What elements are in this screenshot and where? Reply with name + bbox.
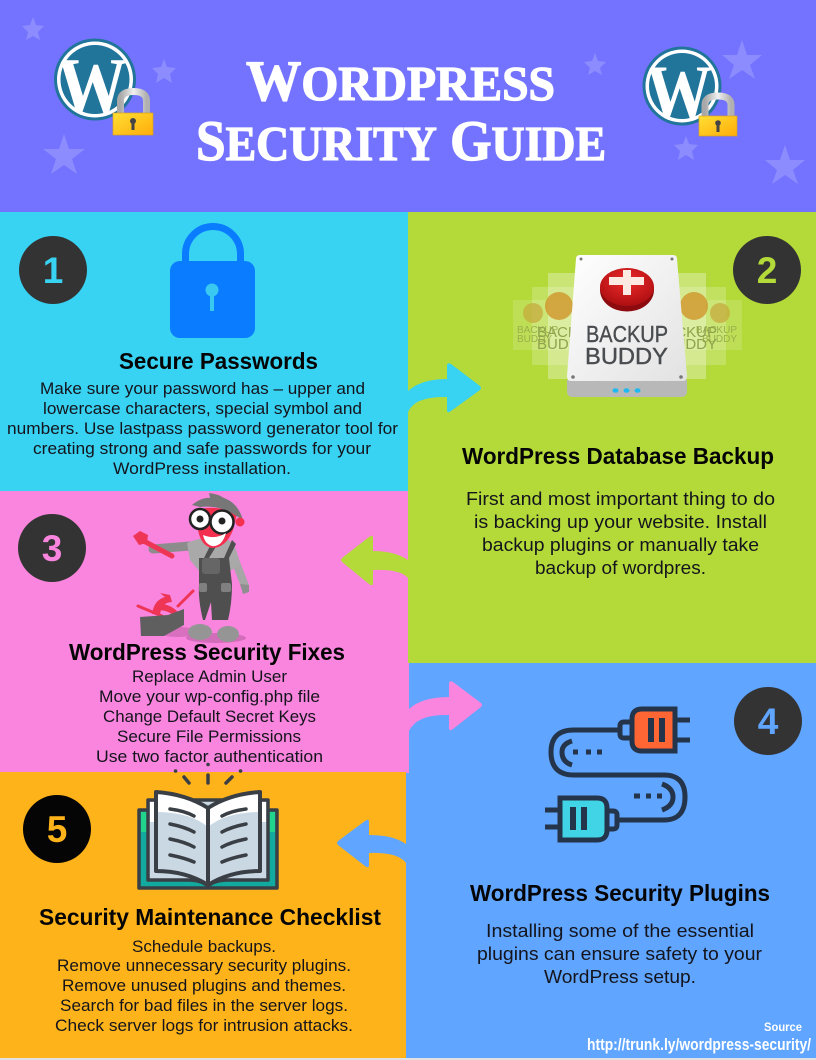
arrow: step 2 to step 3 (341, 536, 408, 585)
head (197, 508, 237, 548)
tools (138, 591, 193, 616)
text block: lowercase characters, special symbol and (43, 399, 362, 418)
number badge 2 (733, 236, 801, 304)
shoes (188, 624, 212, 640)
toolbox (140, 609, 184, 636)
icon: blue padlock (170, 227, 255, 338)
source credit (587, 1020, 811, 1054)
icon: mechanic character with toolbox (133, 493, 249, 643)
ghost drives (513, 273, 742, 379)
number badge 3 (18, 514, 86, 582)
text block: WordPress installation. (113, 459, 291, 478)
panel: 1 secure passwords (0, 212, 408, 491)
number badge 2: 2 (757, 250, 777, 291)
panel: 5 maintenance checklist (0, 764, 406, 1058)
number badge 5: 5 (47, 809, 67, 850)
text block: is backing up your website. Install (474, 511, 767, 532)
ghost drives: BACKUP (537, 324, 599, 341)
text block (7, 379, 398, 478)
shirt (187, 538, 240, 572)
heading: WordPress Database Backup (462, 443, 774, 469)
text block: backup plugins or manually take (482, 534, 759, 555)
heading: WordPress Security Plugins (470, 880, 770, 906)
text block (477, 920, 762, 987)
panel: 4 security plugins (406, 663, 816, 1058)
title (196, 50, 606, 173)
panel: 3 security fixes (0, 491, 409, 773)
arrow: step 4 to step 5 (337, 820, 406, 867)
text block: Replace Admin User (132, 667, 287, 686)
overalls (199, 540, 236, 620)
panel: header (0, 0, 816, 212)
text block: backup of wordpres. (535, 557, 706, 578)
text block: Secure File Permissions (117, 727, 301, 746)
text block: plugins can ensure safety to your (477, 943, 762, 964)
title: WORDPRESS (246, 50, 555, 113)
ghost drives: BUDDY (537, 336, 590, 353)
number badge 4: 4 (758, 701, 779, 742)
ghost drives: BACKUP (696, 325, 737, 336)
heading: Secure Passwords (119, 348, 318, 374)
text block (55, 937, 353, 1035)
ghost drives: BUDDY (517, 334, 552, 345)
icon: WordPress logo with padlock, left: W (57, 41, 127, 132)
text block: Search for bad files in the server logs. (60, 996, 348, 1015)
text block: WordPress setup. (544, 966, 696, 987)
bottom edge (0, 1058, 816, 1060)
arrow: step 3 to step 4 (409, 681, 482, 731)
text block: Schedule backups. (132, 937, 276, 956)
text block: Installing some of the essential (486, 920, 754, 941)
ghost drives: BUDDY (702, 334, 737, 345)
text block: Make sure your password has – upper and (40, 379, 365, 398)
number badge 3: 3 (42, 528, 62, 569)
number badge 1: 1 (43, 250, 63, 291)
text block: Remove unnecessary security plugins. (57, 956, 351, 975)
text block: Move your wp-config.php file (99, 687, 320, 706)
ghost drives: BUDDY (664, 336, 717, 353)
wrench (140, 539, 172, 556)
text block: Remove unused plugins and themes. (62, 976, 346, 995)
text block: creating strong and safe passwords for your (33, 439, 371, 458)
heading: Security Maintenance Checklist (39, 904, 381, 930)
text block (96, 667, 323, 766)
text block: Use two factor authentication (96, 747, 323, 766)
decorative stars (22, 17, 805, 184)
icon: connected plugs (545, 709, 690, 840)
left arm (153, 546, 190, 549)
source credit: Source (764, 1020, 802, 1034)
panel: 2 database backup (408, 212, 816, 663)
number badge 4 (734, 687, 802, 755)
text block: First and most important thing to do (466, 488, 775, 509)
title: SECURITY GUIDE (196, 110, 606, 173)
text block: numbers. Use lastpass password generator tool for (7, 419, 398, 438)
right arm (235, 560, 245, 586)
ghost drives: BACKUP (655, 324, 717, 341)
icon: WordPress logo with padlock, right: W (646, 49, 712, 136)
icon: BackupBuddy drive: BACKUP (586, 321, 668, 347)
arrow: step 1 to step 2 (408, 363, 481, 412)
icon: open book (139, 764, 277, 888)
text block: Check server logs for intrusion attacks. (55, 1016, 353, 1035)
icon: BackupBuddy drive: BUDDY (585, 343, 668, 369)
text block: Change Default Secret Keys (103, 707, 316, 726)
icon: BackupBuddy drive (513, 255, 742, 397)
ghost drives: BACKUP (517, 325, 558, 336)
number badge 5 (23, 795, 91, 863)
heading: WordPress Security Fixes (69, 639, 345, 665)
number badge 1 (19, 236, 87, 304)
text block (466, 488, 775, 578)
